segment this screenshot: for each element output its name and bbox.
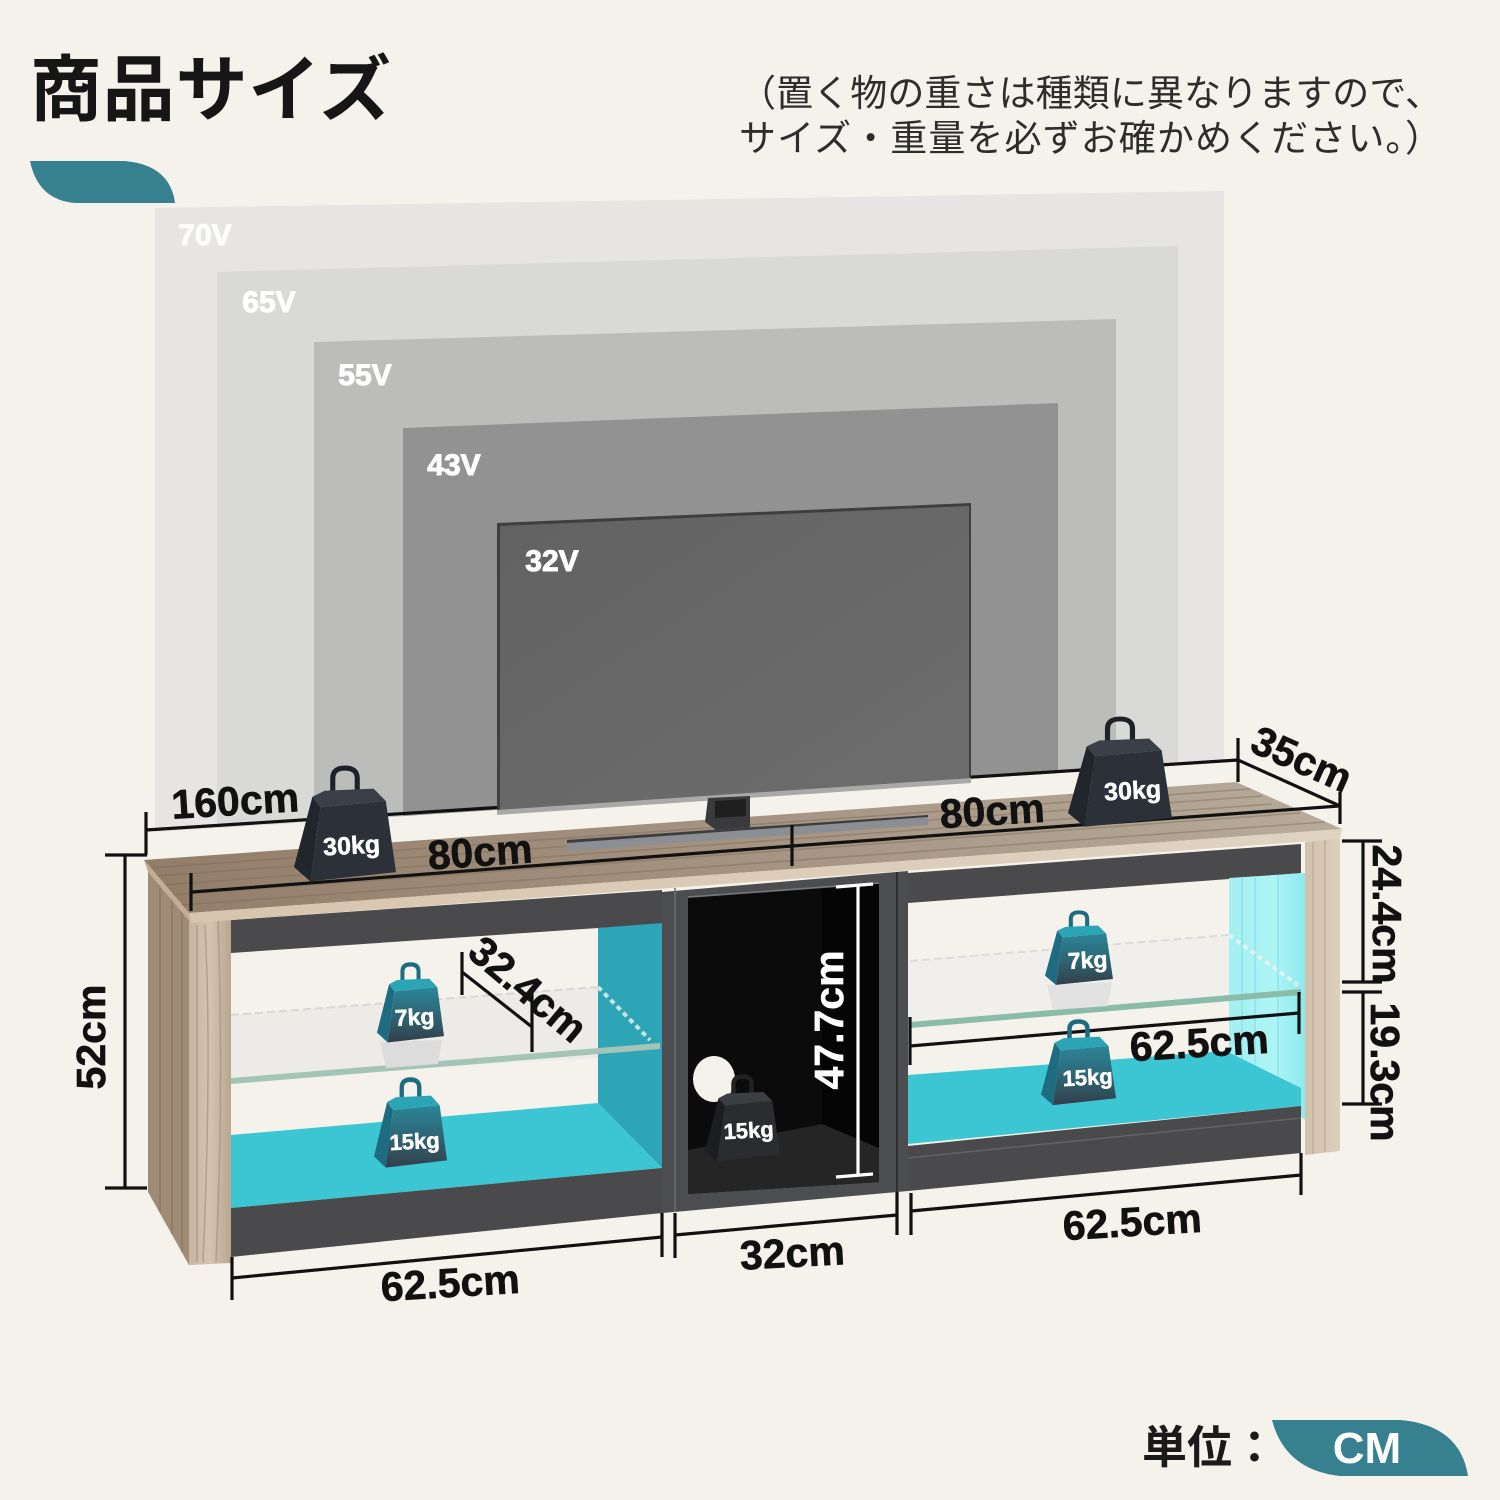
panel: TV cabinet [144,782,1342,1265]
TV size labels: 43V [427,449,481,482]
weight: 15kg left [374,1080,447,1168]
tabletop [144,782,1342,923]
dimension labels: 24.4cm [1364,844,1410,984]
weight labels: 15kg [723,1117,774,1144]
bottom left width [232,1213,662,1300]
weight labels: 7kg [394,1003,435,1031]
TV size labels: 65V [242,286,296,319]
tabletop half widths [191,792,1340,911]
dimension labels: 80cm [938,785,1046,837]
43V outline [403,403,1058,816]
dimension labels: 52cm [68,985,114,1089]
weight: 7kg right [1045,912,1113,985]
65V outline [217,246,1178,828]
depth [1238,760,1340,806]
weight: 30kg left [294,768,396,881]
left side face [148,870,189,1265]
right leg [1305,838,1340,1155]
note text: （置く物の重さは種類に異なりますので、 [739,73,1442,114]
left leg front [189,917,231,1265]
shelf depth [462,952,532,1052]
cable hole [693,1056,735,1102]
dimension labels: 47.7cm [806,950,852,1090]
shelf reflections [380,982,1112,1068]
note text [739,73,1442,159]
weight labels: 30kg [322,831,381,861]
unit label: 単位： [1142,1422,1277,1473]
TV size labels: 55V [338,359,392,392]
unit badge [1272,1420,1468,1476]
weight: 30kg right [1068,719,1172,827]
weight labels: 15kg [1062,1064,1113,1091]
panel: TV size outlines [155,191,1224,832]
dimension: overall width line [146,738,1238,855]
dimension labels: 160cm [170,774,300,828]
inner shelf width [910,992,1299,1065]
unit badge: CM [1333,1424,1401,1473]
inner height marker [836,884,873,1177]
dimension labels: 62.5cm [1061,1195,1203,1249]
center compartment [662,871,908,1213]
weight labels: 15kg [389,1128,440,1155]
right compartment [908,844,1305,1191]
weight labels [322,776,1162,1155]
bottom center width [675,1192,897,1258]
dimension labels: 62.5cm [379,1256,521,1310]
right lower opening height [1342,992,1382,1104]
dimension labels: 32.4cm [460,927,596,1052]
TV stand [567,796,928,851]
weight labels: 7kg [1067,946,1108,974]
dimension lines [105,760,1382,1300]
weight: 15kg right [1041,1022,1116,1105]
TV size labels: 70V [178,219,232,252]
dimension labels: 62.5cm [1128,1016,1270,1070]
weight: 7kg left [377,964,444,1043]
dimension labels: 80cm [426,825,534,879]
note text: サイズ・重量を必ずお確かめください。） [739,118,1442,159]
left compartment [231,890,662,1257]
dimension labels: 32cm [739,1227,846,1279]
TV 32V [497,503,971,815]
dimension labels [68,717,1410,1310]
weight: 15kg center [705,1077,780,1161]
dimension labels: 19.3cm [1362,1002,1408,1142]
70V outline [155,191,1224,832]
55V outline [314,319,1116,822]
overall height [105,855,147,1188]
TV size labels: 32V [525,545,579,578]
right upper opening height [1342,841,1382,982]
bottom right width [911,1153,1301,1235]
weight labels: 30kg [1103,776,1162,806]
dimension labels: 35cm [1244,717,1359,802]
title: 商品サイズ [30,51,391,131]
TV size labels [178,219,579,578]
title accent tab [30,161,175,203]
